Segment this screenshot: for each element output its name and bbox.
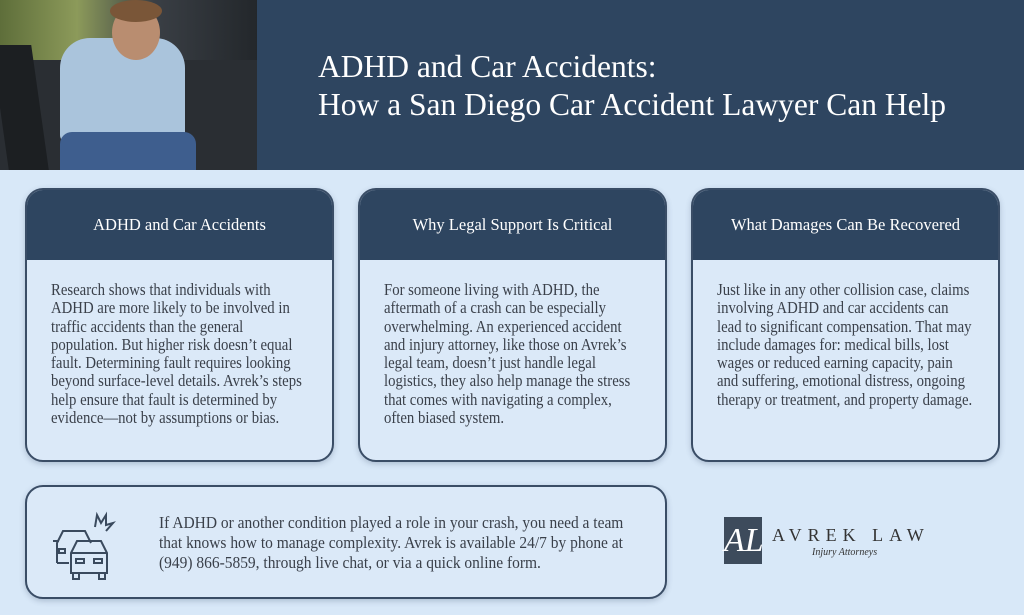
panel: damages: and suffering, emotional distress, ongoing xyxy=(717,371,965,390)
callout: contact xyxy=(25,485,667,599)
panel: damages: Just like in any other collision case, claims xyxy=(717,280,969,299)
panel: ADHD and car accidents xyxy=(25,188,334,462)
panel: ADHD and car accidents: traffic accidents than the general xyxy=(51,317,243,336)
panel: ADHD and car accidents: help ensure that fault is determined by xyxy=(51,390,277,409)
panel: why legal support: and injury attorney, like those on Avrek’s xyxy=(384,335,627,354)
text: contact message: that knows how to manage complexity. Avrek is available 24/7 by phone at xyxy=(159,533,623,552)
panel: damages xyxy=(691,188,1000,462)
panel: why legal support: legal team, doesn’t just handle legal xyxy=(384,353,596,372)
title: ADHD and Car Accidents: xyxy=(318,49,657,84)
title xyxy=(318,49,946,122)
panel: damages: lead to significant compensation. That may xyxy=(717,317,972,336)
panel: damages: therapy or treatment, and property damage. xyxy=(717,390,972,409)
panel: damages: wages or reduced earning capacity, pain xyxy=(717,353,953,372)
panel: ADHD and car accidents: population. But higher risk doesn’t equal xyxy=(51,335,292,354)
panel: why legal support: Why Legal Support Is Critical xyxy=(413,215,612,234)
panel: why legal support: overwhelming. An experienced accident xyxy=(384,317,622,336)
panel: ADHD and car accidents: beyond surface-level details. Avrek’s steps xyxy=(51,371,302,390)
panel: why legal support: aftermath of a crash can be especially xyxy=(384,298,606,317)
panel: ADHD and car accidents: evidence—not by assumptions or bias. xyxy=(51,408,279,427)
logo: Avrek Law: Injury Attorneys xyxy=(812,547,877,558)
panel: damages: What Damages Can Be Recovered xyxy=(731,215,960,234)
photo: stressed driver xyxy=(0,0,257,170)
text: contact message xyxy=(159,513,624,572)
text: contact message: (949) 866-5859, through live chat, or via a quick online form. xyxy=(159,553,541,572)
title: How a San Diego Car Accident Lawyer Can Help xyxy=(318,87,946,122)
logo: Avrek Law: AL xyxy=(724,522,764,559)
panel: ADHD and car accidents: fault. Determining fault requires looking xyxy=(51,353,291,372)
panel: ADHD and car accidents: Research shows that individuals with xyxy=(51,280,271,299)
panel: why legal support: For someone living with ADHD, the xyxy=(384,280,600,299)
panel: ADHD and car accidents: ADHD and Car Accidents xyxy=(93,215,266,234)
logo: Avrek Law xyxy=(722,517,930,564)
text: contact message: If ADHD or another condition played a role in your crash, you need a team xyxy=(159,513,623,532)
panel: why legal support: logistics, they also help manage the stress xyxy=(384,371,630,390)
logo: Avrek Law: AVREK LAW xyxy=(772,525,930,545)
panel: why legal support xyxy=(358,188,667,462)
panel: damages: include damages for: medical bills, lost xyxy=(717,335,949,354)
panel: why legal support: often biased system. xyxy=(384,408,504,427)
panel: ADHD and car accidents: ADHD are more likely to be involved in xyxy=(51,298,290,317)
header banner xyxy=(257,0,1024,170)
icon: crashed cars xyxy=(53,512,116,580)
panel: damages: involving ADHD and car accidents can xyxy=(717,298,948,317)
panel: why legal support: that comes with navigating a complex, xyxy=(384,390,612,409)
